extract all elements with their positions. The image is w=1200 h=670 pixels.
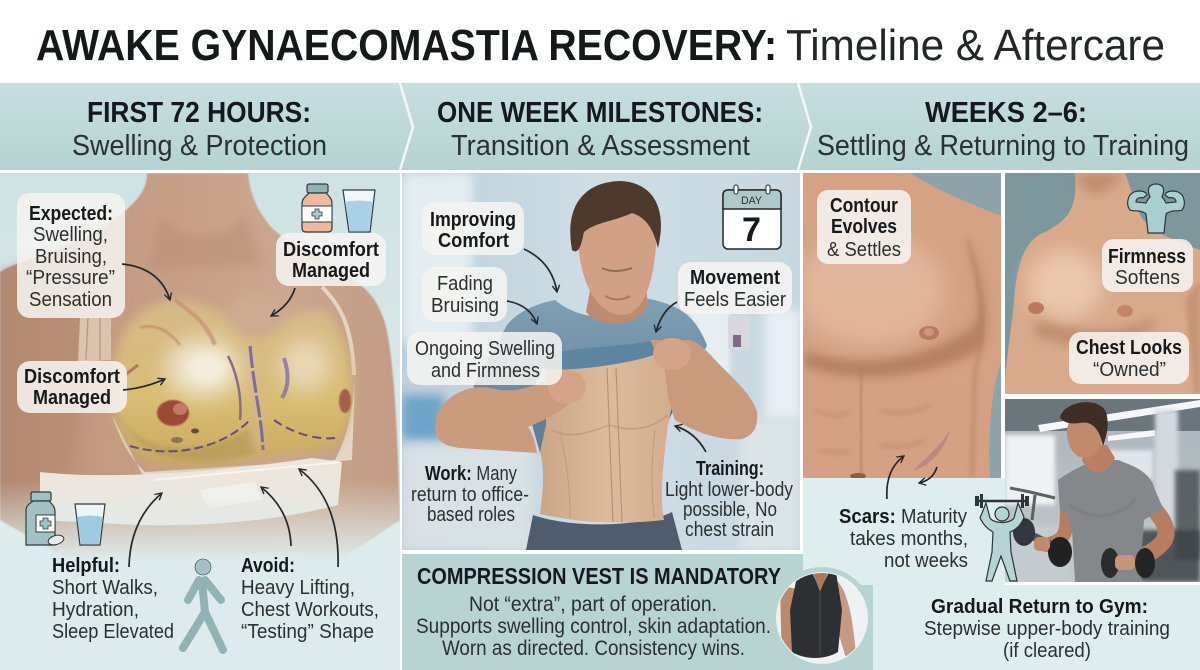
text: training	[665, 458, 793, 541]
callout: improving comfort	[422, 202, 524, 255]
callout: chest looks owned: “Owned”	[1093, 359, 1166, 381]
vest strap left	[78, 317, 111, 362]
icon: water glass bottom	[75, 504, 105, 545]
icon: muscular torso	[1128, 184, 1184, 233]
icon: medicine bottle top	[302, 184, 332, 232]
callout: improving comfort: Comfort	[438, 230, 509, 252]
right arm	[650, 340, 757, 439]
panel: first 72 hours	[0, 173, 400, 670]
panel: compression vest: COMPRESSION VEST IS MANDATORY	[417, 563, 781, 589]
text: training: Light lower-body	[665, 479, 793, 501]
trousers	[526, 512, 682, 550]
panel: gradual return to gym	[873, 585, 1200, 670]
icon: walking figure	[183, 559, 223, 650]
vest panel under chest	[112, 380, 355, 480]
callout: expected: Expected:	[29, 203, 113, 225]
callout: discomfort managed (right): Managed	[292, 260, 370, 282]
heading: one week milestones: ONE WEEK MILESTONES:	[437, 97, 763, 129]
panel: compression vest: Not “extra”, part of operation.	[469, 593, 717, 616]
tshirt	[473, 298, 707, 400]
chest binder tape	[40, 458, 342, 525]
icon: calendar day 7: DAY	[741, 195, 763, 207]
icon: calendar day 7: 7	[742, 211, 761, 249]
callout: expected: Bruising,	[35, 246, 107, 268]
arrows: scars	[887, 456, 937, 499]
panel: compression vest: Worn as directed. Consistency wins.	[442, 637, 745, 660]
photo: softened chest	[1005, 173, 1200, 394]
text: scars	[839, 506, 968, 572]
text: training: chest strain	[685, 519, 774, 541]
heading: first 72 hours: Swelling & Protection	[72, 130, 327, 162]
callout: contour evolves	[817, 190, 911, 264]
callout: fading bruising	[422, 267, 507, 322]
callout: helpful	[52, 555, 174, 643]
callout: fading bruising: Bruising	[431, 295, 499, 317]
callout: discomfort managed (right)	[276, 233, 386, 286]
text: training: Training:	[696, 458, 764, 480]
arm viewer left	[1046, 512, 1067, 545]
photo: settled chest	[795, 173, 1001, 479]
shirt	[1058, 460, 1163, 582]
dumbbells	[1032, 532, 1052, 544]
text: scars: takes months,	[850, 528, 968, 550]
callout: firmness softens: Softens	[1115, 267, 1180, 289]
callout: chest looks owned	[1069, 332, 1189, 384]
callout: contour evolves: & Settles	[827, 239, 901, 261]
text: work: based roles	[427, 504, 515, 526]
text: scars: not weeks	[884, 550, 968, 572]
callout: helpful: Sleep Elevated	[52, 621, 174, 643]
callout: discomfort managed (left): Managed	[33, 387, 111, 409]
photo: gym man with dumbbells	[1005, 399, 1200, 582]
left arm	[435, 381, 568, 453]
callout: discomfort managed (left)	[17, 361, 127, 413]
callout: ongoing swelling	[407, 332, 562, 385]
callout: avoid: Chest Workouts,	[241, 599, 379, 621]
callout: firmness softens: Firmness	[1108, 246, 1186, 268]
icon: medicine bottle bottom	[26, 492, 65, 546]
vest strap right	[322, 287, 354, 375]
text: work: Work: Many	[425, 463, 517, 485]
panel: compression vest	[402, 554, 873, 670]
panel: gradual return to gym: (if cleared)	[1003, 640, 1091, 662]
heading: first 72 hours: FIRST 72 HOURS:	[87, 97, 311, 129]
photo: bruised chest	[0, 173, 400, 555]
text: scars: Scars: Maturity	[839, 506, 967, 528]
heading: one week milestones: Transition & Assessment	[451, 130, 750, 162]
sternum skin	[249, 364, 265, 450]
panel: weeks 2-6	[795, 173, 1200, 585]
heading: first 72 hours	[72, 97, 327, 162]
icon: water glass top	[343, 190, 375, 232]
panel: gradual return to gym: Gradual Return to Gym:	[931, 596, 1148, 618]
callout: ongoing swelling: and Firmness	[431, 360, 540, 382]
heading: one week milestones	[437, 97, 763, 162]
photo: man in compression vest	[402, 173, 800, 550]
callout: discomfort managed (right): Discomfort	[283, 239, 379, 261]
callout: firmness softens	[1102, 239, 1193, 292]
callout: fading bruising: Fading	[437, 273, 493, 295]
callout: chest looks owned: Chest Looks	[1076, 337, 1182, 359]
panel: compression vest: Supports swelling control, skin adaptation.	[416, 615, 771, 638]
callout: helpful: Hydration,	[52, 599, 139, 621]
panel: gradual return to gym: Stepwise upper-body training	[924, 618, 1170, 640]
icon: lifter with barbell	[975, 494, 1029, 581]
title: AWAKE GYNAECOMASTIA RECOVERY:	[36, 21, 777, 70]
callout: avoid	[241, 555, 379, 643]
heading: weeks 2-6	[817, 97, 1189, 162]
callout: helpful: Helpful:	[52, 555, 120, 577]
callout: ongoing swelling: Ongoing Swelling	[415, 338, 555, 360]
title: Timeline & Aftercare	[786, 21, 1165, 70]
callout: avoid: Heavy Lifting,	[241, 577, 355, 599]
callout: discomfort managed (left): Discomfort	[24, 366, 120, 388]
callout: avoid: “Testing” Shape	[241, 621, 374, 643]
arrows: middle panel	[507, 249, 706, 452]
icon: calendar day 7	[723, 185, 781, 249]
callout: contour evolves: Evolves	[831, 216, 897, 238]
arrows: left panel	[122, 264, 338, 567]
callout: expected: Swelling,	[33, 224, 108, 246]
heading: weeks 2-6: WEEKS 2–6:	[925, 97, 1087, 129]
callout: expected	[17, 193, 125, 318]
text: training: possible, No	[683, 499, 777, 521]
arm viewer right	[1142, 505, 1175, 560]
callout: movement	[678, 262, 792, 314]
chest bruising	[113, 300, 352, 466]
callout: contour evolves: Contour	[830, 195, 898, 217]
callout: avoid: Avoid:	[241, 555, 295, 577]
callout: improving comfort: Improving	[430, 209, 516, 231]
panel: one week milestones	[402, 173, 800, 550]
callout: movement: Feels Easier	[684, 289, 786, 311]
text: work	[411, 463, 529, 526]
callout: helpful: Short Walks,	[52, 577, 158, 599]
callout: expected: “Pressure”	[26, 267, 115, 289]
icon: black compression vest in circle	[776, 567, 868, 664]
header band with chevrons	[0, 83, 1200, 170]
text: work: return to office-	[411, 484, 529, 506]
callout: expected: Sensation	[29, 289, 112, 311]
callout: movement: Movement	[690, 267, 780, 289]
head and neck	[1082, 445, 1115, 472]
vest	[540, 352, 672, 523]
neck and head	[586, 290, 648, 324]
